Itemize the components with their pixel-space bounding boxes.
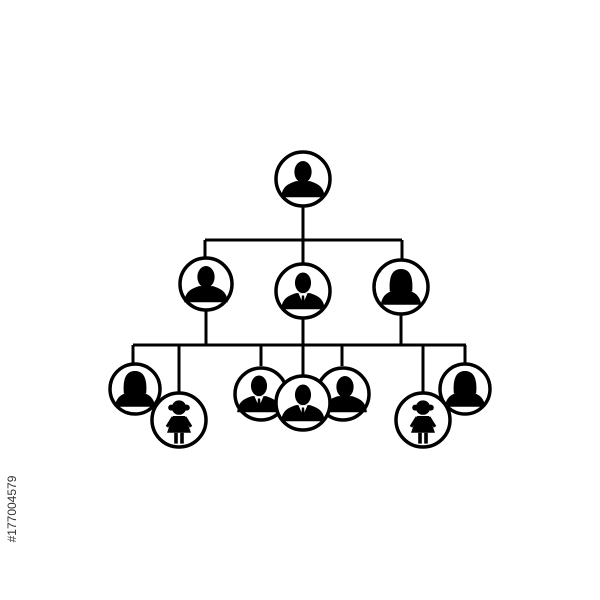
node: top (276, 152, 330, 206)
side stock number: #177004579 (5, 476, 19, 542)
node: bottom girl left (152, 393, 206, 447)
node: bottom man right (317, 368, 369, 420)
node: middle left (180, 258, 232, 310)
connector lines (133, 206, 466, 392)
node: bottom woman left (110, 364, 160, 414)
node: bottom suit center (276, 376, 330, 430)
node: bottom woman right (440, 364, 490, 414)
node: bottom girl right (396, 393, 450, 447)
node: middle center (276, 264, 330, 318)
node: middle right (374, 260, 428, 314)
node: bottom suit left (235, 368, 287, 420)
